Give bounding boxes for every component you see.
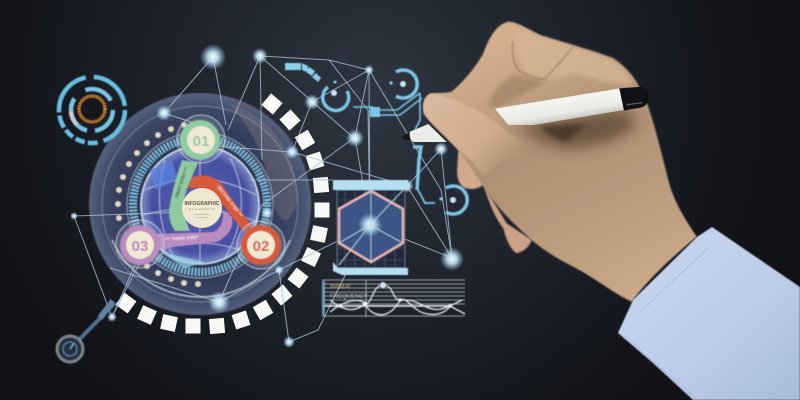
pen cap [619, 87, 649, 111]
hand base [423, 22, 697, 302]
frequency chart [322, 280, 465, 317]
centre circle [182, 188, 222, 228]
circle glyph lower right [446, 186, 467, 214]
label: third step: *** THIRD STEP [165, 235, 198, 242]
hexagon [339, 191, 403, 262]
badge 01 [177, 115, 225, 163]
shirt cuff [618, 227, 800, 400]
hand and pen [402, 22, 697, 302]
ribbon: three steps [155, 160, 252, 249]
icon: top-left gauge [59, 77, 125, 143]
circle glyph upper left [323, 87, 349, 110]
sphere hologram [89, 93, 311, 315]
web shadow [488, 75, 547, 108]
hexagon panel [333, 180, 408, 275]
knuckle crease [513, 42, 573, 79]
shadow under pen [512, 108, 638, 148]
thumb [423, 93, 523, 177]
globe [141, 146, 259, 264]
blue HUD circuit [285, 63, 467, 214]
wave curves [330, 285, 465, 315]
circle glyph upper right [396, 70, 417, 98]
circuit trace [353, 93, 422, 130]
pen tip [402, 133, 411, 141]
label: second step: SECOND STEP *** [216, 185, 244, 218]
range label: RANGE [330, 284, 351, 290]
pen barrel [495, 88, 624, 125]
icon: bottom-left dial [57, 301, 115, 362]
badge 01: 01 [193, 133, 209, 150]
node glows [70, 44, 464, 348]
centre circle: ELEMENTS [189, 207, 215, 211]
white square ring [116, 93, 330, 334]
ring finger [483, 185, 532, 253]
top dashes [285, 63, 321, 82]
finger highlight [515, 30, 633, 85]
frequency label: FREQUENCY [330, 294, 368, 300]
badge 02: 02 [253, 238, 269, 255]
badge 03: 03 [132, 238, 148, 255]
label: first step: FIRST STEP *** [174, 166, 189, 198]
dotted ring [115, 122, 201, 287]
infographic title: INFOGRAPHIC [184, 201, 220, 207]
ribbon green first step [169, 160, 198, 231]
ribbon purple third step [155, 210, 232, 249]
ribbon red second step [187, 175, 252, 232]
badge 02 [237, 221, 285, 269]
badge 03 [116, 220, 164, 268]
network lines [74, 56, 452, 342]
tick ring [135, 140, 265, 270]
pen lower barrel [410, 124, 447, 142]
lower finger [457, 150, 487, 189]
